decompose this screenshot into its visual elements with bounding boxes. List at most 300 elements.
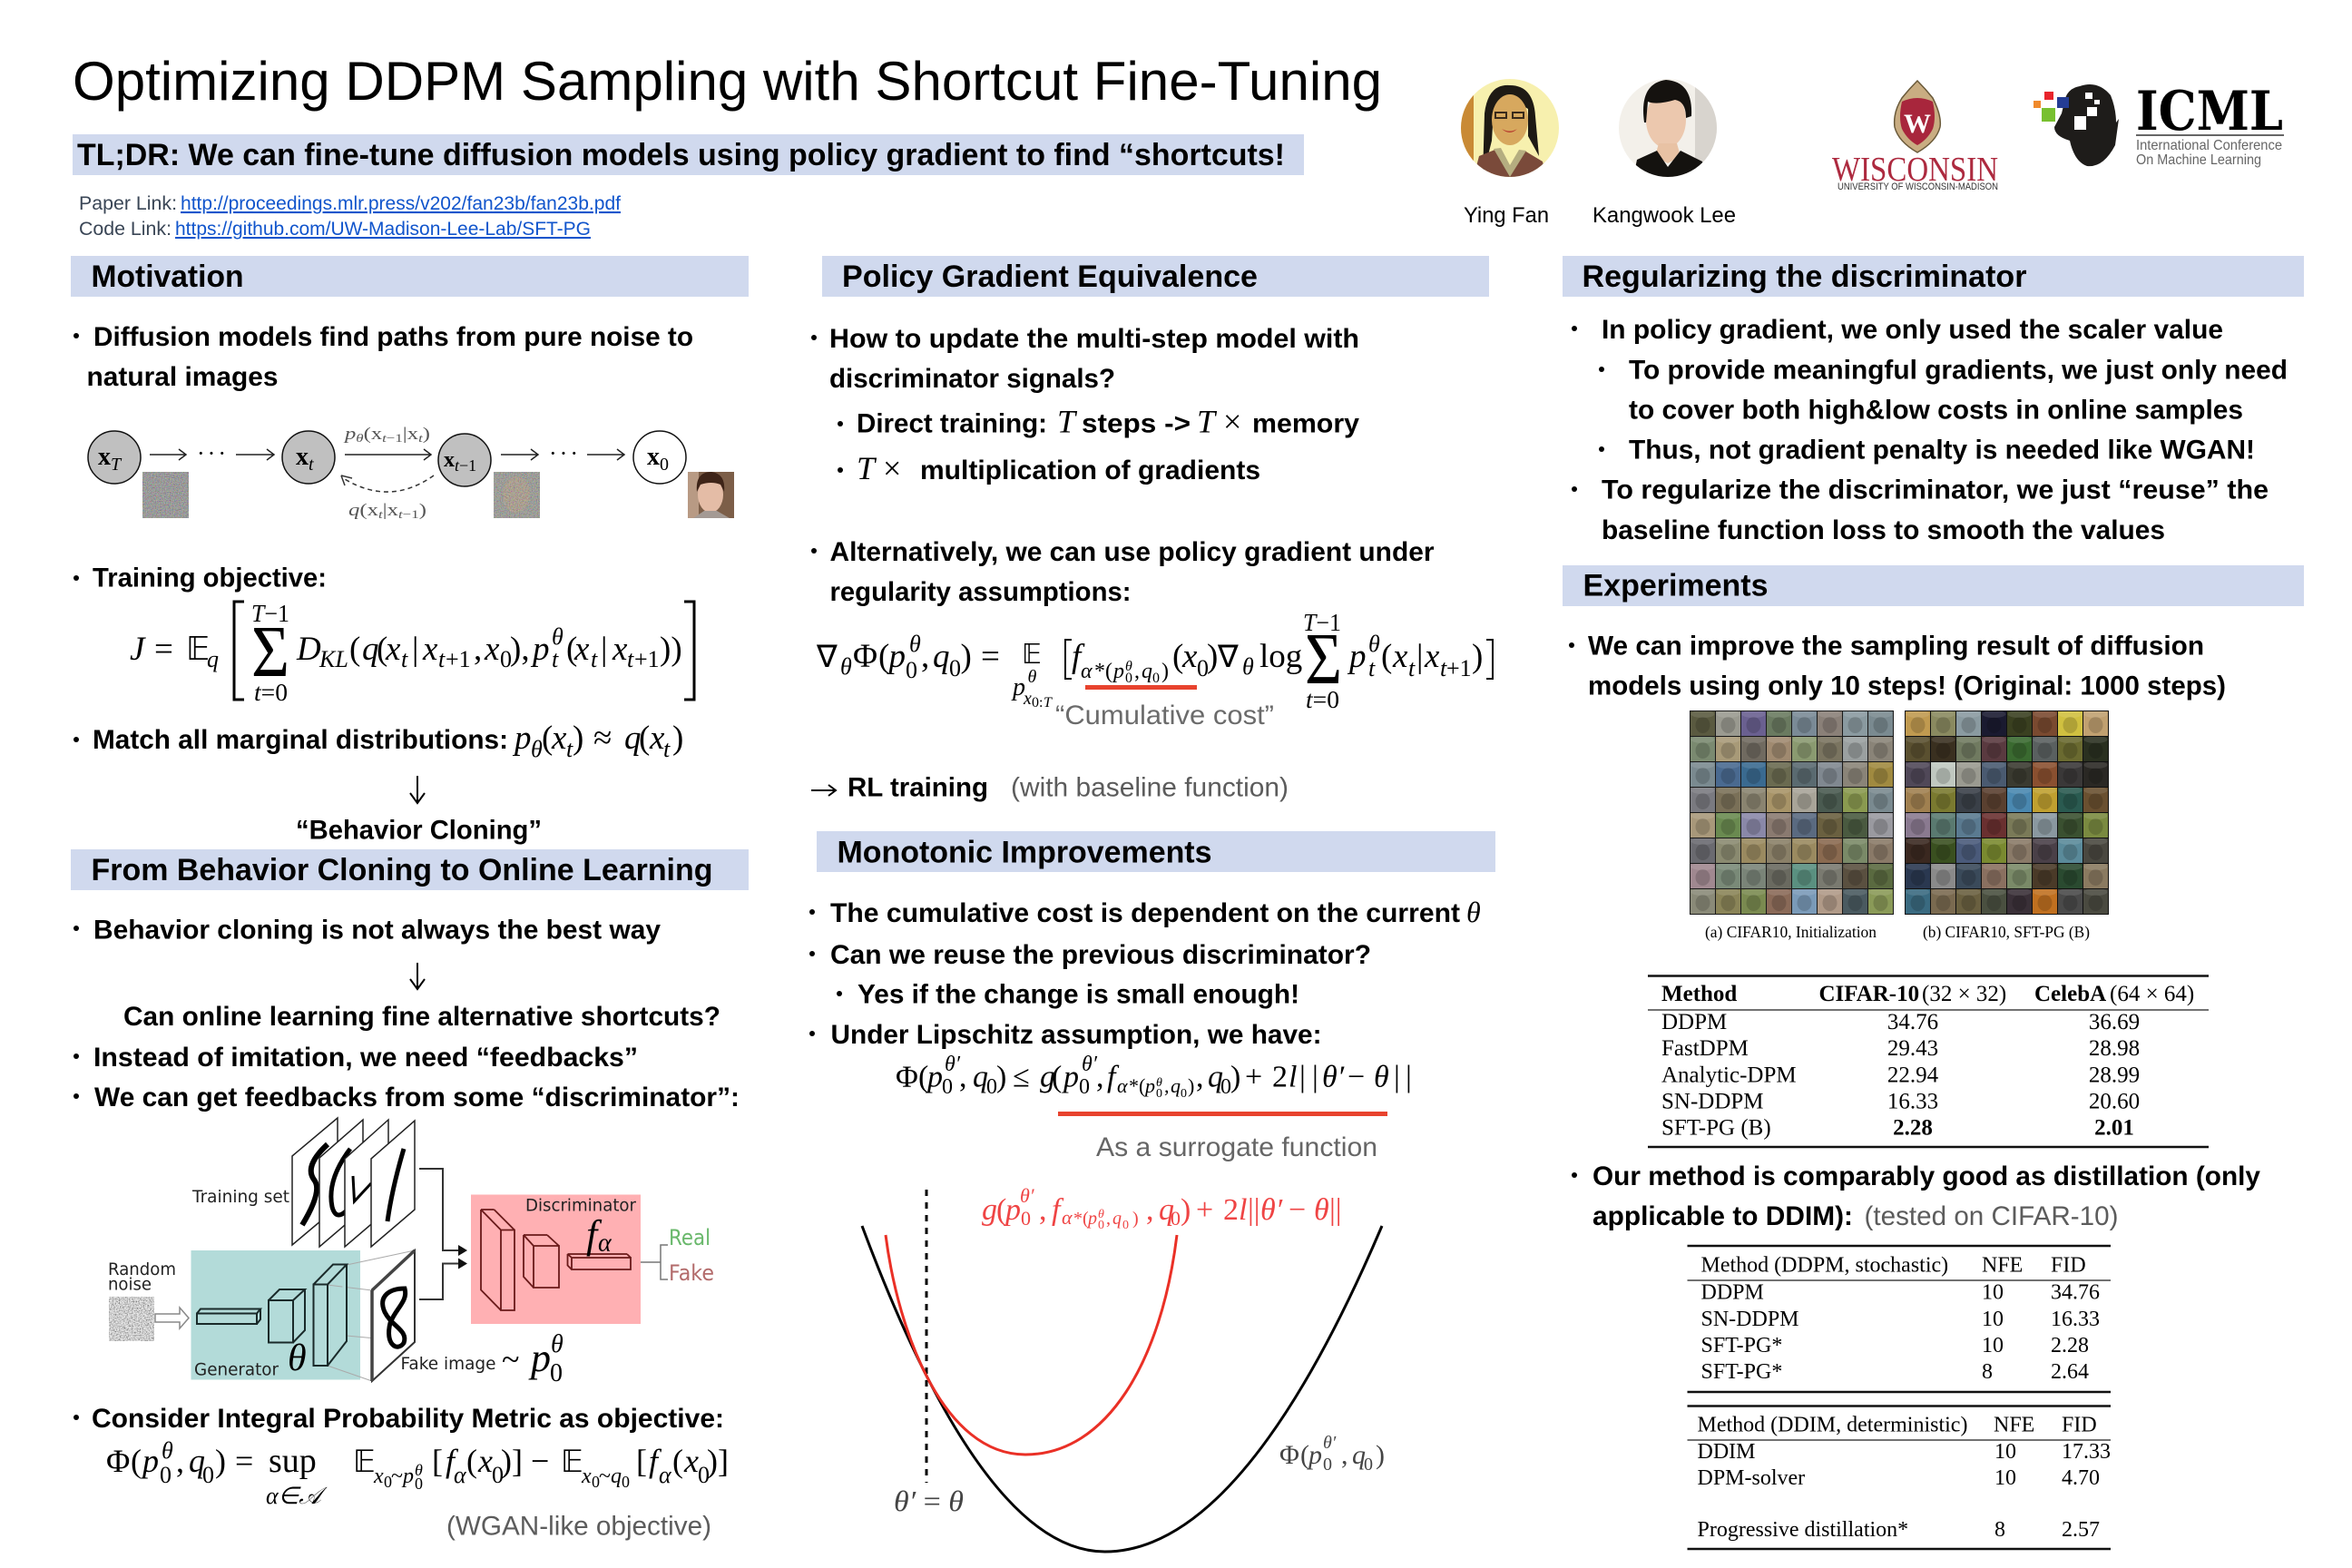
table: DDPM stochastic: Method (DDPM, stochastic) [1700,1254,1948,1278]
formula: Lipschitz bound: 0 [986,1075,997,1099]
formula: policy gradient: t [1440,655,1447,681]
formula: training objective J: x [422,631,438,668]
heading: Policy Gradient Equivalence [822,256,1489,297]
formula: WGAN-like objective: 0 [492,1462,504,1488]
formula: policy gradient: *( [1094,660,1112,683]
paper and code links: https://github.com/UW-Madison-Lee-Lab/SFT-PG [175,219,591,240]
text: sampling result: We can improve the sampling result of diffusion [1588,632,2204,661]
black curve Phi [862,1226,1382,1552]
formula: policy gradient: q [1142,660,1152,683]
diagram: diffusion chain: p [342,425,356,444]
text: cumulative cost dependent: The cumulative cost is dependent on the current [830,898,1460,928]
arrow: down [410,776,425,803]
formula: WGAN-like objective: )] [501,1443,523,1479]
formula: training objective J: x [484,631,500,668]
label theta prime equals theta: θ′ = θ [894,1485,964,1517]
diagram: diffusion chain: |x [403,425,419,444]
formula: policy gradient: | [1416,638,1423,675]
heading: Regularizing the discriminator [1563,256,2304,297]
text: multiplication of gradients: multiplication of gradients [920,456,1260,485]
formula: WGAN-like objective: = [235,1443,253,1479]
table: FID comparison: 29.43 [1887,1036,1938,1061]
formula: WGAN-like objective: x [581,1465,592,1488]
formula: WGAN-like objective: 0 [415,1475,423,1493]
formula: policy gradient: Σ [1305,620,1342,700]
red underline: surrogate [1058,1112,1387,1116]
table: FID comparison: CelebA [2034,982,2106,1006]
table: FID comparison: Method [1661,982,1737,1006]
diagram: diffusion chain: ··· [549,440,581,466]
table: FID comparison: 28.99 [2089,1063,2140,1088]
formula: training objective J: , [474,631,482,668]
formula: policy gradient: 𝔼 [1022,639,1042,671]
arrows into discriminator [419,1169,467,1299]
label Phi: , [1341,1440,1348,1470]
red surrogate label: 0 [1171,1207,1181,1230]
real / fake outputs: Fake [669,1260,714,1286]
formula: WGAN-like objective: ( [131,1443,142,1479]
formula: training objective J: 0 [500,646,512,672]
formula: Lipschitz bound: 0 [1181,1087,1187,1101]
formula: policy gradient: x [1392,638,1408,675]
label: Fake image [401,1330,564,1387]
formula: policy gradient: p [1011,673,1025,701]
table: FID comparison: 20.60 [2089,1090,2140,1114]
formula: policy gradient: x [1023,689,1032,709]
formula: training objective J: t [627,646,634,672]
formula: WGAN-like objective: ( [466,1443,477,1479]
author photo: Ying Fan [1461,79,1559,177]
table: FID comparison: 16.33 [1887,1090,1938,1114]
formula: WGAN-like objective: , [176,1443,184,1479]
red surrogate label: − [1289,1193,1306,1227]
text: discriminator feedback: We can get feedbacks from some “discriminator”: [94,1083,740,1112]
formula: WGAN-like objective: 𝔼 [561,1444,583,1480]
formula: Lipschitz bound: q [1208,1060,1223,1094]
table: DDPM stochastic: SN-DDPM [1700,1308,1799,1331]
panel: Policy Gradient Equivalence [811,256,1493,802]
text: match marginals: t [663,736,671,762]
table: DDIM deterministic: 8 [1994,1518,2005,1542]
text: meaningful gradients [1629,356,2288,425]
table: FID comparison: 2.28 [1893,1116,1933,1141]
label: Training set: Training set [191,1187,289,1207]
captions: (b) CIFAR10, SFT-PG (B) [1923,923,2090,942]
captions [1705,923,2090,942]
formula: training objective J: x [385,631,401,668]
table: DDPM stochastic: DDPM [1700,1281,1764,1305]
table: FID comparison: 36.69 [2089,1010,2140,1034]
table: FID comparison: 34.76 [1887,1010,1938,1034]
text: match marginals: Match all marginal distributions: [93,725,508,755]
text: match marginals: p [512,720,532,757]
diagram: diffusion chain: T [111,455,122,475]
label Phi: 0 [1323,1455,1332,1475]
formula: policy gradient: , [1134,660,1140,683]
text: alternatively policy gradient: regularity assumptions: [829,577,1131,607]
formula: Lipschitz bound: l [1289,1060,1297,1094]
table: FID comparison: Analytic-DPM [1661,1063,1797,1088]
formula: policy gradient: ( [1172,638,1183,675]
red surrogate label: , [1146,1193,1154,1227]
table: DDPM stochastic: 2.64 [2051,1360,2089,1384]
text: match marginals: t [566,736,573,762]
formula: WGAN-like objective: α [659,1462,672,1488]
panel: Motivation [71,256,749,521]
text: direct training: T [1057,403,1078,439]
generator box [191,1250,360,1379]
red surrogate label: g [982,1193,997,1227]
author name: Ying Fan: Ying Fan [1464,203,1549,228]
table: FID comparison: SN-DDPM [1661,1090,1764,1114]
red surrogate label: q [1112,1209,1122,1229]
image grid: CIFAR10 SFT-PG [1905,710,2109,915]
diagram: diffusion chain: t [309,455,314,475]
label: Fake image: θ [551,1330,564,1358]
table: DDIM deterministic: 10 [1994,1440,2016,1464]
red surrogate curve [886,1235,1177,1455]
noise image [109,1297,154,1341]
red surrogate label: θ′ [1020,1184,1035,1207]
formula: policy gradient: log [1259,638,1302,675]
formula: Lipschitz bound: ( [918,1060,928,1094]
table: DDPM stochastic: 10 [1982,1308,2004,1331]
formula: policy gradient: +1 [1446,655,1472,681]
formula: policy gradient: f [1072,638,1085,675]
formula: WGAN-like objective: ~ [599,1465,611,1488]
diagram: diffusion chain: ) [423,425,430,444]
logo: University of Wisconsin-Madison: W [1904,109,1931,139]
TL;DR banner: TL;DR: We can fine-tune diffusion models using policy gradient to find “shortcuts! [77,138,1285,172]
diagram: diffusion chain: q(x [348,501,374,520]
formula: training objective J: t [591,646,598,672]
logo: University of Wisconsin-Madison: UNIVERSITY OF WISCONSIN-MADISON [1838,181,1998,192]
label Phi: θ′ [1323,1433,1337,1453]
formula: WGAN-like objective: 𝔼 [353,1444,376,1480]
paper and code links: Code Link: [79,219,172,240]
formula: training objective J: | [412,631,418,668]
formula: WGAN-like objective: [ [432,1443,443,1479]
red surrogate label: 0 [1021,1207,1031,1230]
formula: Lipschitz bound: θ′ [945,1053,961,1076]
text: meaningful gradients: To provide meaningful gradients, we just only need [1629,356,2288,385]
text: how to update [829,324,1359,394]
theta: θ [288,1338,307,1379]
formula: Lipschitz bound: , [1196,1060,1203,1094]
formula: Lipschitz bound: *( [1129,1074,1145,1097]
table: FID comparison: DDPM [1661,1010,1727,1034]
formula: WGAN-like objective: p [140,1443,159,1479]
red surrogate label: 2 [1223,1193,1239,1227]
formula: policy gradient: ) [1161,660,1169,683]
formula: policy gradient: 0 [1197,655,1209,681]
formula: training objective J: θ [552,623,564,650]
text: cumulative cost dependent: θ [1466,896,1481,928]
formula: training objective J: t [401,646,408,672]
formula: policy gradient: ( [1381,638,1392,675]
real / fake outputs [641,1225,714,1286]
formula: Lipschitz bound: p [926,1060,943,1094]
text: regularize reuse: To regularize the discriminator, we just “reuse” the [1602,475,2269,505]
formula: Lipschitz bound: ( [1052,1060,1062,1094]
dashed line theta [926,1190,927,1483]
formula: WGAN-like objective: ( [672,1443,683,1479]
formula: policy gradient: α [1081,660,1093,683]
text: behavior cloning: “Behavior Cloning” [296,815,542,846]
label: Fake image: 0 [550,1359,563,1387]
formula: policy gradient: 0: [1032,695,1043,710]
text: match marginals: ( [639,720,650,757]
formula: Lipschitz bound: ) [996,1060,1006,1094]
table: DDPM stochastic: SFT-PG* [1700,1334,1782,1357]
text: direct training: T × [1197,403,1241,439]
note: cumulative cost: “Cumulative cost” [1055,701,1274,730]
text: diffusion models: Diffusion models find paths from pure noise to [93,322,693,352]
text: direct training: memory [1252,408,1359,439]
text: direct training: steps -> [1082,408,1191,439]
formula: Lipschitz bound: q [1171,1074,1181,1097]
heading: Experiments [1563,565,2304,606]
table: FID comparison: (64 × 64) [2110,982,2194,1006]
table: DDIM deterministic: Progressive distillation* [1697,1518,1908,1542]
paper and code links [79,193,621,240]
table: DDIM deterministic: 2.57 [2062,1518,2100,1542]
red surrogate label: *( [1073,1209,1089,1229]
text: diffusion models [87,322,693,392]
formula: WGAN-like objective: Φ [106,1443,130,1479]
f alpha: α [598,1229,612,1258]
formula: WGAN-like objective: [ [636,1443,647,1479]
table: DDPM stochastic: NFE [1982,1254,2023,1278]
formula: training objective J: p [530,631,550,668]
label: Fake image: ~ [502,1341,519,1377]
formula: WGAN-like objective: 0 [698,1462,710,1488]
formula: WGAN-like objective: α∈𝒜 [266,1483,328,1509]
formula: WGAN-like objective: x [683,1443,699,1479]
text: IPM objective: Consider Integral Probability Metric as objective: [92,1404,724,1434]
formula: policy gradient: p [1347,638,1367,675]
text: meaningful gradients: to cover both high&low costs in online samples [1629,396,2243,425]
text: how to update: discriminator signals? [829,364,1115,394]
table: FID comparison: CIFAR-10 [1818,982,1919,1006]
red surrogate label: q [1159,1193,1174,1227]
diagram: diffusion chain: θ [356,431,364,445]
label: Discriminator: Discriminator [525,1196,636,1216]
panel: Monotonic Improvements [809,831,1495,1552]
diagram: diffusion chain: x [647,443,660,471]
logo: ICML: ICML [2136,80,2283,143]
formula: Lipschitz bound: , [959,1060,967,1094]
table: FID comparison [1648,976,2209,1147]
formula: policy gradient: 0 [949,655,961,681]
formula: policy gradient: T [1044,695,1053,710]
title: Optimizing DDPM Sampling with Shortcut Fine-Tuning [73,51,1382,112]
formula: policy gradient: T−1 [1303,609,1341,636]
formula: Lipschitz bound: ) [1188,1074,1194,1097]
text: online learning question: Can online learning fine alternative shortcuts? [123,1002,720,1032]
formula: WGAN-like objective: α [454,1462,467,1488]
red surrogate label: f [1052,1193,1064,1227]
formula: WGAN-like objective: 0 [202,1462,214,1488]
formula: policy gradient: , [921,638,929,675]
label Phi: ) [1376,1440,1385,1470]
text: training objective: Training objective: [93,563,327,593]
text: RL training [811,773,1289,802]
panel: Experiments [1563,565,2304,1549]
label: Random noise: Random [108,1259,176,1279]
text: regularize reuse [1602,475,2269,545]
text: match marginals: ) [573,720,583,757]
label Phi: q [1352,1440,1366,1470]
author photo: Kangwook Lee [1619,79,1717,177]
formula: policy gradient: θ [909,631,921,657]
formula: WGAN-like objective: 0 [622,1473,630,1491]
diagram: diffusion chain [88,425,734,521]
table: DDPM stochastic: 10 [1982,1281,2004,1305]
red surrogate label: θ [1314,1193,1329,1227]
formula: WGAN-like objective: x [477,1443,493,1479]
text: no gradient penalty: Thus, not gradient penalty is needed like WGAN! [1629,436,2255,465]
formula: Lipschitz bound: α [1117,1074,1128,1097]
formula: WGAN-like objective: ~ [391,1465,403,1488]
text: direct training: Direct training: [857,408,1047,439]
formula: Lipschitz bound: θ′ [1082,1053,1098,1076]
text: sampling result: models using only 10 steps! (Original: 1000 steps) [1588,671,2226,701]
formula: training objective J: ( [566,631,577,668]
formula: policy gradient: θ [1027,667,1036,687]
formula: policy gradient: ) [960,638,972,675]
formula: training objective J: | [601,631,607,668]
red underline: cumulative cost [1085,685,1197,690]
formula: training objective J: +1 [634,646,660,672]
table: DDIM deterministic: FID [2062,1414,2097,1437]
formula: training objective J: 𝔼 [186,631,210,668]
formula: WGAN-like objective: q [611,1465,622,1488]
formula: training objective J: J [130,631,146,668]
note: WGAN-like objective: (WGAN-like objective) [446,1512,711,1541]
formula: Lipschitz bound: , [1164,1074,1169,1097]
formula: Lipschitz bound: θ [1374,1060,1389,1094]
formula: WGAN-like objective: f [649,1443,662,1479]
formula: training objective J: ), [510,631,530,668]
text: match marginals: x [649,720,665,757]
formula: Lipschitz bound: 0 [1156,1087,1162,1101]
formula: Lipschitz bound: q [973,1060,988,1094]
heading: From Behavior Cloning to Online Learning: From Behavior Cloning to Online Learning [91,853,713,887]
diagram: diffusion chain: t [398,507,403,521]
text: RL training: RL training [848,773,988,802]
formula: Lipschitz bound: ) [1230,1060,1240,1094]
table: DDPM stochastic: 34.76 [2051,1281,2100,1305]
formula: policy gradient: 0 [1125,671,1132,686]
formula: Lipschitz bound: − [1348,1060,1365,1094]
table: DDIM deterministic: DDIM [1697,1440,1755,1464]
formula: WGAN-like objective [106,1437,729,1509]
diagram: diffusion chain: ) [419,501,426,520]
formula: policy gradient: ∇ [816,639,838,675]
text: how to update: How to update the multi-step model with [829,324,1359,354]
diagram: diffusion chain: t [382,431,387,445]
red surrogate label: || [1329,1193,1342,1227]
label: Random noise [108,1259,176,1294]
red surrogate label: ) [1132,1209,1139,1229]
text: feedbacks: Instead of imitation, we need “feedbacks” [93,1043,638,1073]
formula: policy gradient: x [1181,638,1198,675]
table: DDPM stochastic: 8 [1982,1360,1993,1384]
formula: WGAN-like objective: x [373,1465,384,1488]
formula: Lipschitz bound: 0 [942,1075,953,1099]
text: diffusion models: natural images [87,362,278,392]
formula: policy gradient: θ [840,653,852,680]
table: FID comparison: 22.94 [1887,1063,1939,1088]
formula: Lipschitz bound: | [1406,1060,1412,1094]
text: RL training: (with baseline function) [1011,773,1289,802]
formula: policy gradient: = [981,638,1000,675]
diagram: GAN generator and discriminator [108,1118,714,1387]
table: DDPM stochastic: FID [2051,1254,2086,1278]
label Phi: p [1307,1440,1322,1470]
formula: WGAN-like objective: − [531,1443,549,1479]
paper and code links: Paper Link: [79,193,177,214]
diagram: diffusion chain: |x [383,501,399,520]
text: multiplication of gradients: T × [857,450,901,486]
formula: training objective J: D [296,631,321,668]
formula: policy gradient: x [1424,638,1440,675]
text: sampling result [1588,632,2226,701]
formula: policy gradient: t=0 [1306,686,1339,713]
note: surrogate function: As a surrogate function [1096,1132,1377,1162]
formula: training objective J: +1 [446,646,471,672]
formula: Lipschitz bound: Φ [896,1060,918,1094]
red surrogate label: α [1062,1206,1073,1229]
diagram: diffusion chain: x [296,443,309,471]
text: comparable to distillation: applicable to DDIM): [1592,1201,1853,1231]
formula: WGAN-like objective: sup [269,1442,317,1480]
discriminator box [471,1194,641,1324]
table: DDIM deterministic: Method (DDIM, deterministic) [1697,1414,1967,1437]
heading: Monotonic Improvements [817,831,1495,872]
text: direct training [857,403,1359,439]
formula: training objective J: = [154,631,173,668]
text: match marginals: x [551,720,567,757]
text: comparable to distillation: (tested on CIFAR-10) [1864,1201,2118,1231]
diagram: diffusion chain: −1 [387,431,403,445]
diagram: diffusion chain: x [444,448,455,472]
formula: WGAN-like objective: 0 [592,1473,600,1491]
formula: policy gradient: θ [1368,631,1380,657]
formula: WGAN-like objective: 0 [384,1473,392,1491]
author name: Kangwook Lee: Kangwook Lee [1592,203,1736,228]
formula: Lipschitz bound: θ [1156,1076,1162,1090]
table: DDIM deterministic [1688,1406,2111,1549]
text: alternatively policy gradient [829,537,1435,607]
red surrogate label: || [1248,1193,1260,1227]
arrow: down [410,963,425,989]
diagram: diffusion chain: ··· [197,440,229,466]
formula: Lipschitz bound: 0 [1220,1075,1231,1099]
diagram: diffusion chain: t−1 [455,456,476,475]
red surrogate label: 0 [1098,1219,1104,1232]
table: FID comparison: 2.01 [2094,1116,2134,1141]
discriminator layers [481,1210,631,1310]
heading: Policy Gradient Equivalence: Policy Gradient Equivalence [842,260,1258,294]
diagram: diffusion chain: t [418,431,423,445]
table: FID comparison: (32 × 32) [1922,982,2006,1006]
text: match marginals: θ [531,736,543,762]
red surrogate label: , [1106,1209,1111,1229]
formula: training objective J: ( [349,631,360,668]
formula: training objective J: )) [660,631,682,668]
